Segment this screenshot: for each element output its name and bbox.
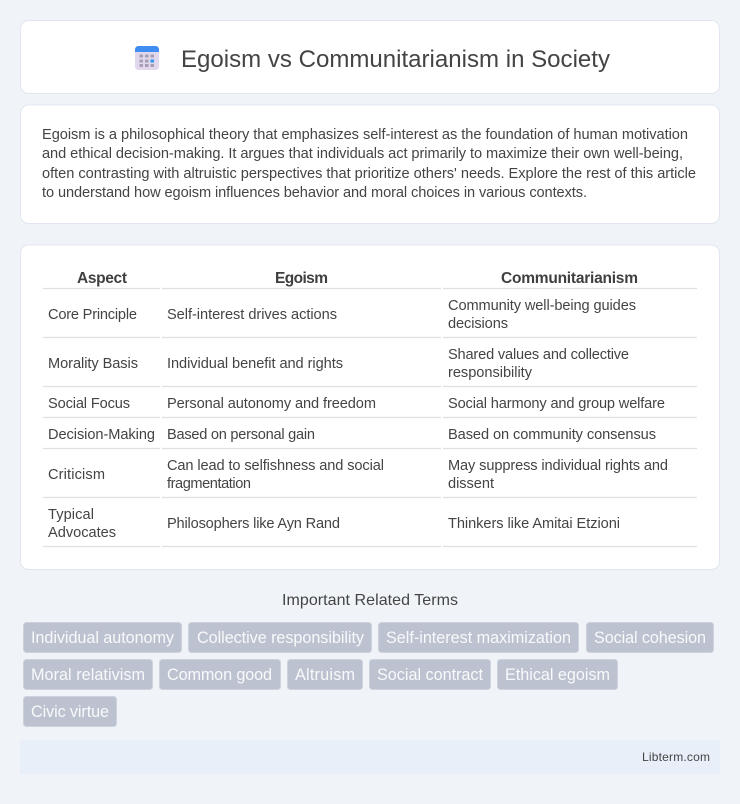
table row: Core Principle: Core Principle [48,307,137,323]
table row: Criticism: Can lead to selfishness and social [167,458,384,474]
table row: Decision-Making: Decision-Making [48,427,155,443]
table row: Criticism: Criticism [48,467,105,483]
tag: Ethical egoism [498,660,618,690]
table row: Typical Advocates: Typical [48,507,94,523]
icon: calendar grid [135,46,159,70]
tag: Moral relativism [24,660,152,690]
heading: related terms: Important Related Terms [282,592,458,609]
table row: Morality Basis: Individual benefit and rights [167,356,343,372]
tag: Collective responsibility [188,622,372,652]
table row: Criticism [43,458,697,498]
table row: Morality Basis [43,347,697,386]
tag: Individual autonomy: Individual autonomy [31,629,175,647]
table row: Social Focus [43,396,697,418]
tag: Civic virtue [24,696,116,726]
table row: Morality Basis: responsibility [448,365,533,381]
tag: Civic virtue: Civic virtue [31,703,109,721]
text block: introduction: to understand how egoism influences behavior and moral choices in various contexts. [42,185,587,201]
tag: Altruism [288,660,362,690]
footer [20,740,720,774]
tag: Common good: Common good [167,666,272,684]
panel: comparison table [20,245,720,570]
table row: Morality Basis: Morality Basis [48,356,138,372]
table row: Core Principle [43,298,697,338]
tag: Social cohesion: Social cohesion [594,629,706,647]
table header row: Egoism [275,270,328,287]
table header row [43,270,697,288]
table row: Typical Advocates: Philosophers like Ayn Rand [167,516,340,532]
text block: introduction: Egoism is a philosophical theory that emphasizes self-interest as the foundation of human motivation [42,127,688,143]
tag: Altruism: Altruism [295,666,355,684]
table row: Core Principle: decisions [448,316,508,332]
tag: Collective responsibility: Collective responsibility [197,629,365,647]
tag: Social contract: Social contract [377,666,484,684]
table row: Social Focus: Social Focus [48,396,130,412]
table row: Core Principle: Community well-being guides [448,298,636,314]
table header row: Aspect [77,270,127,287]
table row: Social Focus: Personal autonomy and freedom [167,396,376,412]
table row: Morality Basis: Shared values and collective [448,347,629,363]
panel: introduction text [20,105,720,224]
tag: Individual autonomy [24,622,182,652]
panel: header [20,20,720,94]
table row: Typical Advocates: Thinkers like Amitai Etzioni [448,516,620,532]
tag: Ethical egoism: Ethical egoism [505,666,610,684]
table row: Criticism: dissent [448,476,494,492]
related term tags [24,622,714,726]
tag: Social contract [370,660,490,690]
text block: introduction: and ethical decision-making. It argues that individuals act primarily to maximize their own well-being, [42,146,683,162]
tag: Self-interest maximization: Self-interest maximization [386,629,571,647]
table row: Decision-Making: Based on community consensus [448,427,656,443]
footer: Libterm.com [642,750,710,764]
table row: Core Principle: Self-interest drives actions [167,307,337,323]
tag: Social cohesion [586,622,714,652]
table row: Decision-Making [43,427,697,448]
table row: Social Focus: Social harmony and group welfare [448,396,665,412]
text block: introduction [42,127,696,201]
table row: Criticism: May suppress individual rights and [448,458,668,474]
tag: Self-interest maximization [378,622,578,652]
tag: Moral relativism: Moral relativism [31,666,145,684]
table row: Decision-Making: Based on personal gain [167,427,315,443]
tag: Common good [160,660,280,690]
table row: Criticism: fragmentation [167,476,251,492]
table row: Typical Advocates: Advocates [48,525,116,541]
text block: introduction: often contrasting with altruistic perspectives that prioritize others' needs. Explore the rest of this article [42,166,696,182]
table row: Typical Advocates [43,507,697,546]
table header row: Communitarianism [501,270,638,287]
title: Egoism vs Communitarianism in Society [181,46,610,73]
